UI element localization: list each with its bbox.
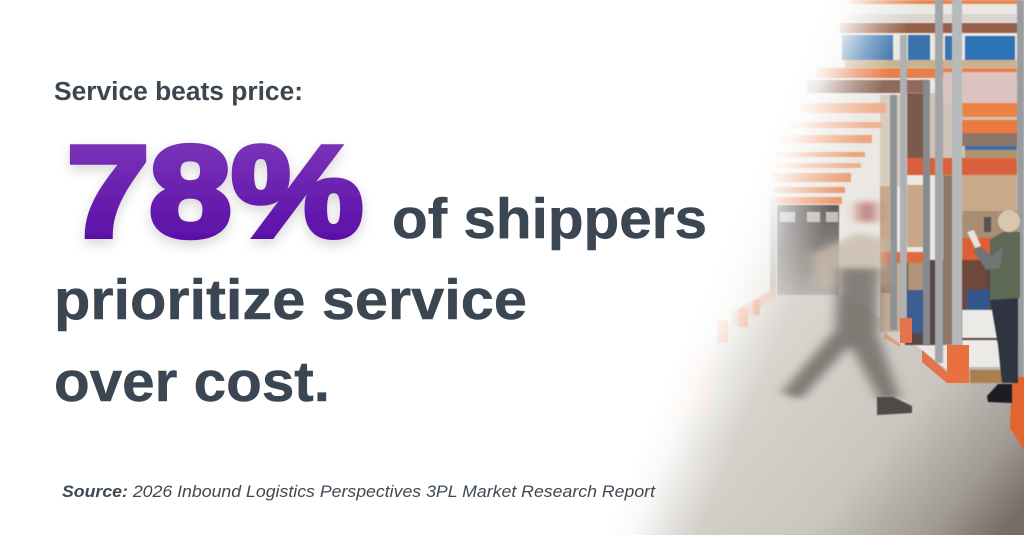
back wall — [560, 0, 1024, 535]
back door — [777, 205, 839, 295]
headline line 2: prioritize service — [54, 268, 527, 332]
headline line 1: of shippers — [392, 187, 707, 251]
source citation: Source: 2026 Inbound Logistics Perspectives 3PL Market Research Report — [62, 483, 657, 501]
man's head — [998, 210, 1020, 232]
rack uprights — [890, 0, 1024, 380]
man's legs — [990, 296, 1018, 383]
rack backdrop — [880, 93, 1018, 383]
floor — [560, 295, 1024, 535]
scanner — [984, 217, 991, 232]
warehouse photo — [560, 0, 1024, 535]
blurred walking worker — [782, 202, 900, 400]
man's arm — [973, 247, 1003, 270]
headline line 3: over cost. — [54, 350, 330, 414]
receding shelf beams — [773, 0, 1020, 204]
worker boot — [877, 397, 912, 415]
right rack goods — [842, 35, 1018, 383]
man with tablet — [967, 210, 1020, 403]
carried box — [810, 232, 887, 287]
worker body and legs — [782, 268, 900, 400]
orange rack feet — [884, 318, 1024, 450]
left rack fading out — [670, 195, 776, 413]
tablet — [967, 230, 981, 248]
man's boot — [987, 384, 1012, 403]
kicker heading: Service beats price: — [54, 78, 303, 106]
big statistic 78%: 78% — [67, 120, 363, 264]
worker head — [857, 202, 877, 222]
man's vest — [990, 232, 1020, 300]
